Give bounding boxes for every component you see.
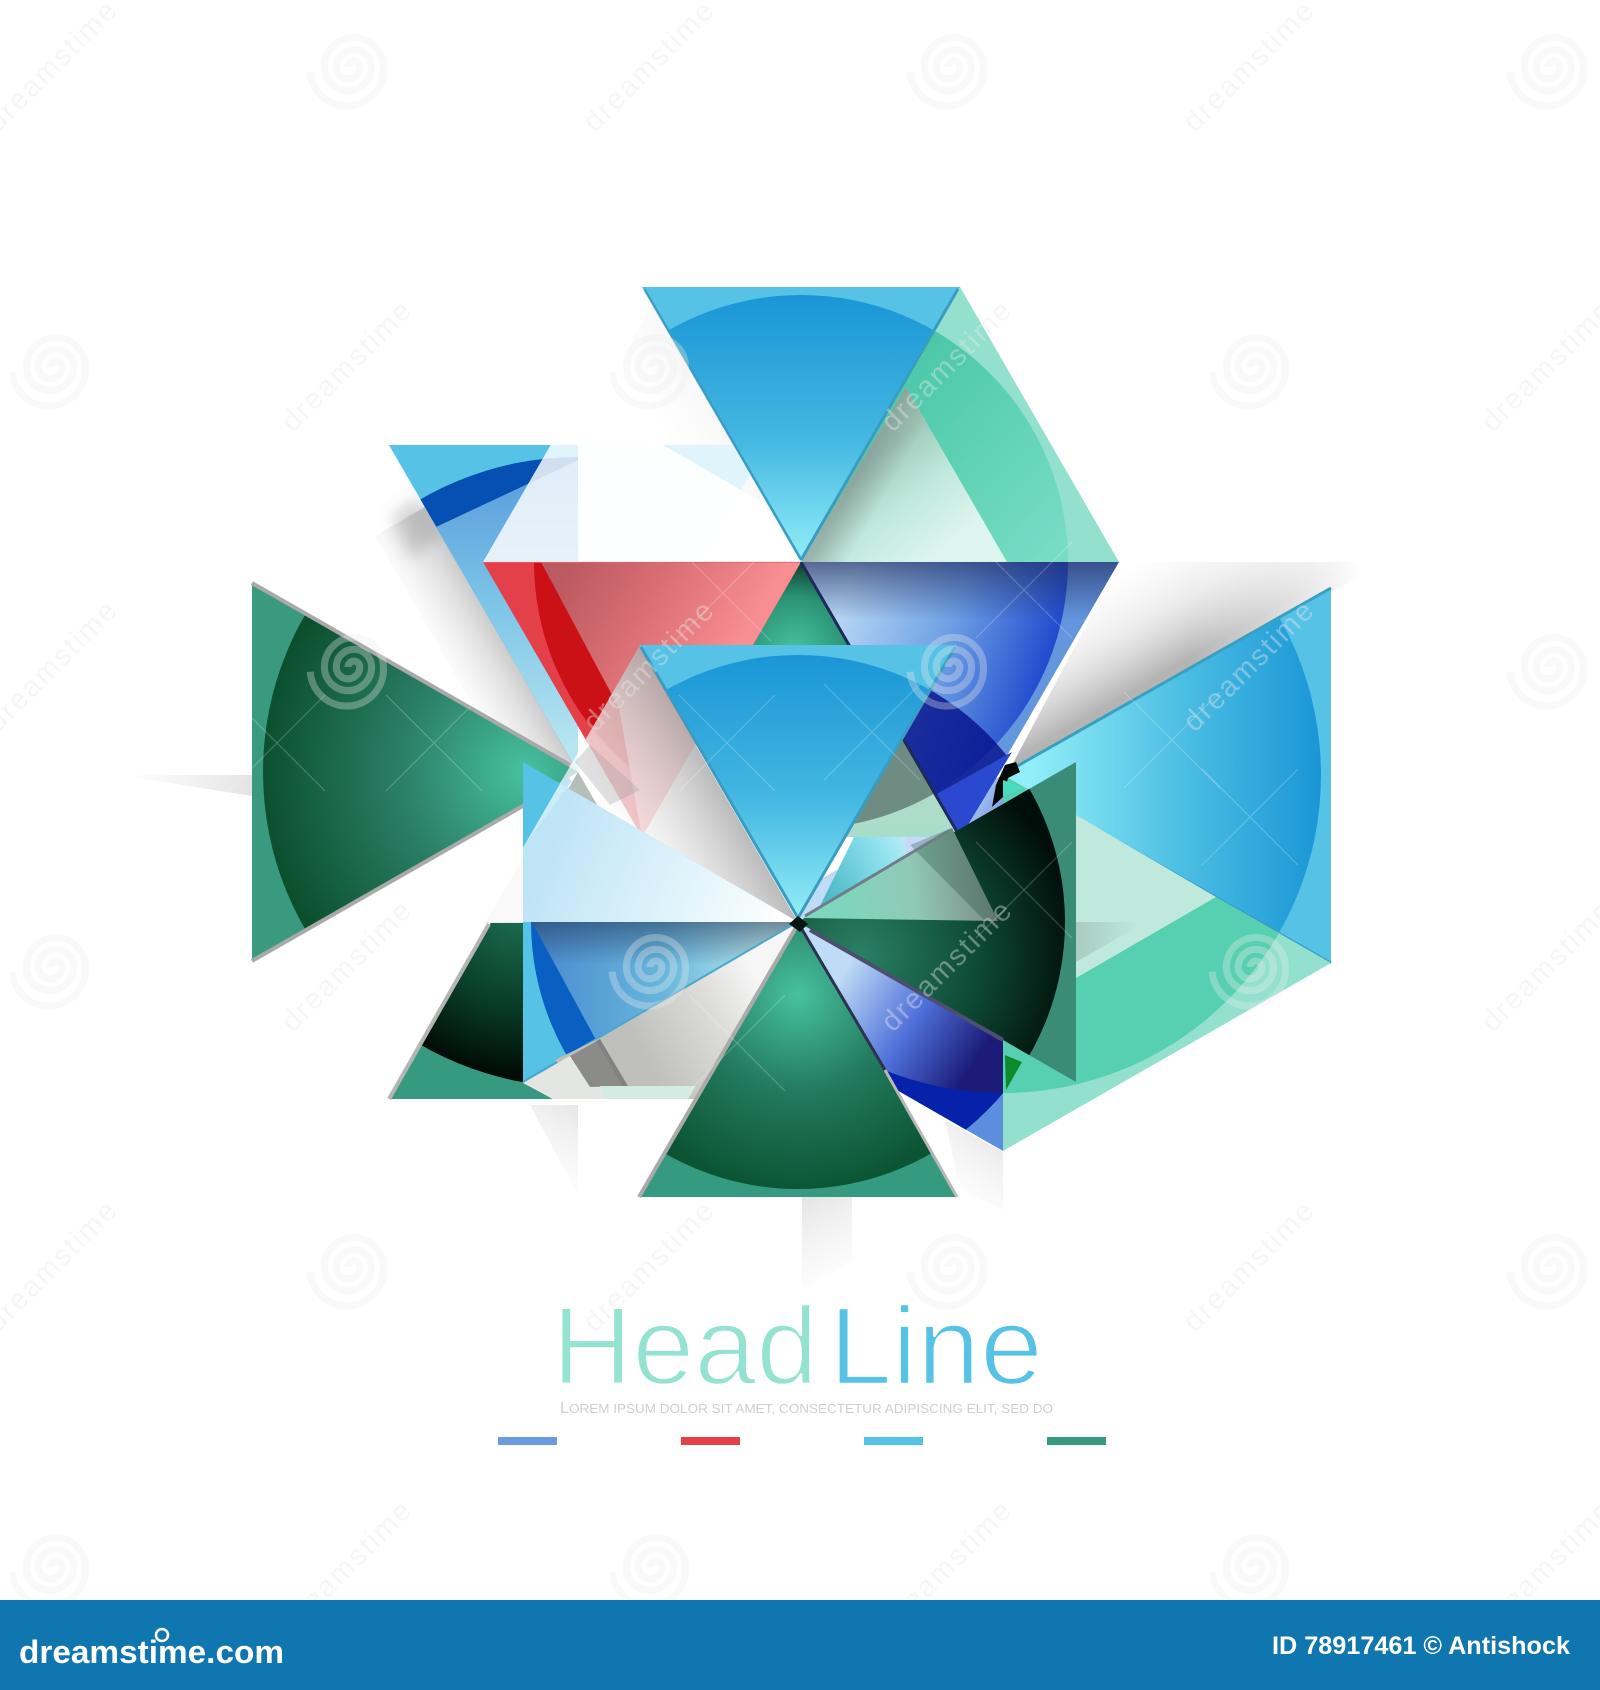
top hexagon [483,287,1119,837]
watermark text: dreamstime [577,1195,720,1338]
centre dark hub [789,916,808,932]
title: HeadLine [552,1285,1043,1408]
lower grey glass panel [523,924,796,1099]
upper blue triangle [389,445,750,772]
title: HeadLine: Head [552,1285,818,1408]
lower centre green triangle [753,564,955,837]
watermark crosshair lines [229,542,1298,1091]
colour legend bars [498,1437,1106,1445]
footer logo mark [156,1629,168,1641]
watermark text: dreamstime [1177,595,1320,738]
right blue triangle [1003,588,1331,963]
lower left blue triangle [795,776,1003,1151]
red triangle [483,562,801,837]
lower right mint triangle [1003,775,1331,1151]
footer bar [0,1600,1600,1690]
lower pale blue panel [523,922,798,1082]
soft drop shadows [120,305,1392,1290]
watermark text: dreamstime [875,895,1018,1038]
subtitle: LOREM IPSUM DOLOR SIT AMET, CONSECTETUR ADIPISCING ELIT, SED DO [560,1400,1053,1417]
watermark text: dreamstime [875,1495,1018,1638]
footer logo text: dreamstime.com [19,1634,284,1670]
top blue triangle of centre hexagon [639,645,957,920]
small mint tip [992,762,1024,807]
upper left translucent white triangle [483,287,801,562]
watermark text: dreamstime [275,1495,418,1638]
left green triangle [252,583,578,961]
lower right blue triangle [800,562,1119,832]
right hexagon: blue, mint and blue triangles [795,586,1332,1151]
cyan glints near centre right [820,826,962,906]
title: HeadLine: Line [829,1285,1043,1408]
watermark text: dreamstime [577,595,720,738]
watermark text: dreamstime [275,895,418,1038]
centre hexagon [480,645,1076,1197]
left blue triangle of rotated hexagon [523,762,798,1082]
image id and credit: ID 78917461 © Antishock [1272,1632,1570,1660]
top blue triangle [642,287,960,562]
bottom green triangle [639,922,957,1197]
watermark text: dreamstime [275,295,418,438]
right dark green triangle [798,762,1076,1090]
white backing under the glass, hiding the green triangle [642,693,798,925]
translucent white upper left triangle [480,647,798,922]
watermark text: dreamstime [1177,1195,1320,1338]
left hexagon: green, blue and dark green triangles [251,445,750,1100]
lower dark green triangle [387,772,597,1100]
upper right mint triangle [801,287,1119,562]
watermark text: dreamstime [875,295,1018,438]
